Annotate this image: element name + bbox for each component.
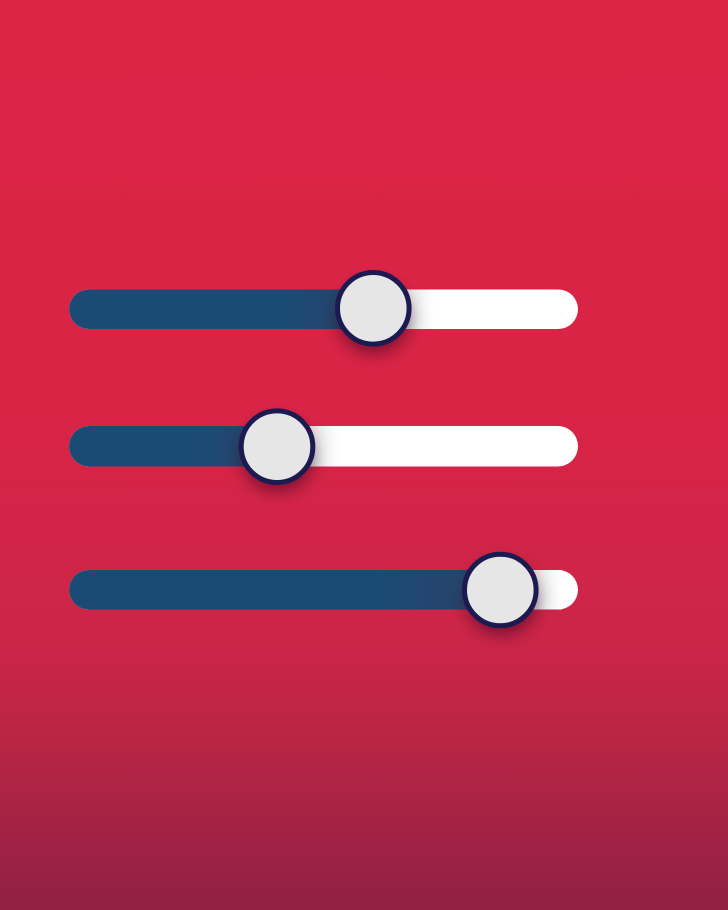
- shadow: slider 2 knob: [242, 420, 314, 492]
- shading: slider 1 white fade: [372, 290, 434, 329]
- track: slider 2 remaining: [69, 426, 578, 466]
- track: slider 2 filled: [69, 426, 277, 466]
- shading: slider 3 fill fade: [378, 570, 500, 610]
- track: slider 3 remaining: [69, 570, 578, 610]
- track: slider 3 filled: [69, 570, 500, 610]
- slider 1: [69, 272, 578, 354]
- knob: slider 2: [241, 411, 313, 483]
- shading: slider 1 fill fade: [290, 290, 372, 329]
- shadow: slider 1 knob: [338, 282, 410, 354]
- shading: slider 3 white fade: [500, 570, 562, 610]
- slider 3: [69, 554, 578, 635]
- shading: slider 2 fill fade: [195, 426, 277, 466]
- knob: slider 3: [464, 554, 536, 626]
- knob: slider 1: [338, 272, 409, 344]
- shadow: slider 3 knob: [466, 563, 538, 635]
- shading: slider 2 white fade: [277, 426, 339, 466]
- slider 2: [69, 411, 578, 492]
- track: slider 1 remaining: [69, 290, 578, 329]
- track: slider 1 filled: [69, 290, 372, 329]
